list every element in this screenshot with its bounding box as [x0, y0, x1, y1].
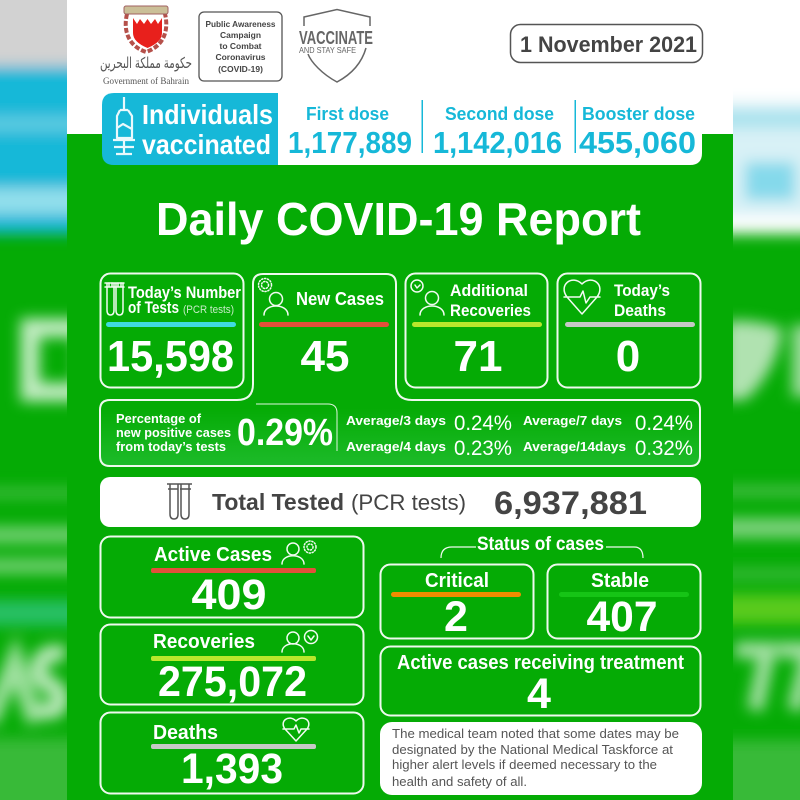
- percentage text: [116, 411, 333, 454]
- new cases: New Cases: [296, 289, 384, 309]
- averages: Average/14days: [523, 439, 626, 454]
- note: designated by the National Medical Taskforce at: [392, 743, 674, 757]
- panel: deaths: 1,393: [181, 745, 283, 793]
- icon: person with heart: [282, 630, 318, 652]
- percentage text: from today’s tests: [116, 439, 226, 454]
- panel: additional recoveries: Recoveries: [450, 301, 531, 320]
- panel: active cases receiving treatment: Active cases receiving treatment: [397, 652, 684, 674]
- banner label: Individuals: [142, 99, 273, 130]
- panel: stable: Stable: [591, 570, 649, 592]
- panel: critical: 2: [444, 593, 468, 641]
- panel: critical: Critical: [425, 570, 489, 592]
- panel: stable: 407: [586, 593, 658, 641]
- second dose: 1,142,016: [433, 125, 562, 160]
- status of cases heading: [441, 534, 643, 558]
- panel: additional recoveries: [406, 274, 548, 388]
- right blurred side strip: [733, 0, 800, 800]
- vaccination banner: [102, 93, 702, 165]
- percentage text: 0.29%: [237, 412, 333, 454]
- note: health and safety of all.: [392, 775, 527, 789]
- status of cases heading: Status of cases: [477, 534, 604, 555]
- panel: active cases: Active Cases: [154, 544, 272, 566]
- booster dose: 455,060: [579, 125, 696, 160]
- new cases: [258, 278, 389, 381]
- averages: Average/4 days: [346, 439, 446, 454]
- banner label: [102, 93, 278, 165]
- first dose: 1,177,889: [288, 125, 412, 160]
- averages: 0.24%: [635, 412, 693, 435]
- title: Daily COVID-19 Report: [156, 193, 641, 245]
- panel: today's tests: of Tests: [128, 298, 179, 317]
- total tested bar: (PCR tests): [351, 490, 466, 515]
- averages: 0.32%: [635, 437, 693, 460]
- averages: [346, 412, 693, 460]
- first dose: First dose: [306, 104, 389, 124]
- panel: recoveries: 275,072: [158, 658, 307, 706]
- panel: deaths: [100, 712, 364, 794]
- panel: active cases: [100, 536, 364, 619]
- percentage text: Percentage of: [116, 411, 202, 426]
- icon: test tubes: [105, 283, 124, 315]
- total tested bar: [100, 477, 701, 527]
- second dose: Second dose: [445, 104, 554, 124]
- icon: heartbeat: [283, 718, 309, 741]
- panel: recoveries: Recoveries: [153, 631, 255, 653]
- panel: today's deaths: Deaths: [614, 301, 666, 320]
- new cases: 45: [301, 332, 349, 381]
- campaign box: Campaign: [220, 30, 261, 40]
- panel: today's tests: [100, 274, 244, 388]
- note: The medical team noted that some dates may be: [392, 727, 679, 741]
- panel: today's deaths: 0: [616, 332, 640, 381]
- panel: active cases receiving treatment: [380, 646, 700, 718]
- campaign box: (COVID-19): [218, 64, 263, 74]
- panel: additional recoveries: 71: [454, 332, 502, 381]
- icon: heartbeat: [564, 280, 600, 314]
- second dose: [433, 104, 562, 160]
- first dose: [288, 104, 412, 160]
- panel: critical: [380, 564, 534, 641]
- panel: active cases: 409: [192, 571, 266, 619]
- averages: 0.24%: [454, 412, 512, 435]
- note: [380, 722, 702, 795]
- panel: today's deaths: [558, 274, 700, 388]
- averages: Average/3 days: [346, 413, 446, 428]
- note: higher alert levels if deemed necessary to the: [392, 758, 657, 772]
- panel: deaths: Deaths: [153, 722, 218, 744]
- panel: additional recoveries: Additional: [450, 281, 528, 300]
- panel: today's tests: Today’s Number: [128, 283, 241, 302]
- vaccinate shield: [299, 10, 373, 82]
- averages: 0.23%: [454, 437, 512, 460]
- booster dose: [579, 104, 696, 160]
- icon: test tubes: [167, 484, 192, 519]
- campaign box: Public Awareness: [206, 19, 276, 29]
- panel: today's deaths: Today’s: [614, 281, 670, 300]
- campaign box: [199, 12, 282, 81]
- averages: Average/7 days: [523, 413, 622, 428]
- icon: person with virus: [258, 278, 288, 315]
- banner label: vaccinated: [142, 129, 271, 160]
- logo: Government of Bahrain: [100, 6, 192, 87]
- center green panel: [67, 134, 733, 800]
- icon: syringe: [113, 97, 135, 154]
- panel: recoveries: [100, 624, 364, 706]
- booster dose: Booster dose: [582, 104, 695, 124]
- Arabic calligraphy: حكومة مملكة البحرين: [100, 55, 192, 72]
- panel: stable: [548, 564, 700, 641]
- icon: person with virus: [282, 541, 316, 564]
- logo: Government of Bahrain: Government of Bahrain: [103, 76, 189, 87]
- panel: active cases receiving treatment: 4: [527, 670, 551, 718]
- campaign box: to Combat: [219, 41, 262, 51]
- percentage text: new positive cases: [116, 425, 231, 440]
- date: 1 November 2021: [520, 32, 697, 57]
- total tested bar: Total Tested: [212, 489, 344, 515]
- coat of arms: [124, 6, 168, 52]
- vaccinate shield: AND STAY SAFE: [299, 46, 356, 55]
- panel: percentage with new cases outline: [100, 274, 700, 466]
- panel: today's tests: (PCR tests): [183, 304, 234, 316]
- campaign box: Coronavirus: [215, 52, 266, 62]
- date: [510, 24, 702, 62]
- total tested bar: 6,937,881: [494, 485, 647, 521]
- icon: person with heart: [411, 280, 444, 315]
- panel: today's tests: 15,598: [107, 332, 234, 381]
- vaccinate shield: VACCINATE: [299, 28, 373, 48]
- white header area: [67, 0, 733, 134]
- left blurred side strip: [0, 0, 67, 800]
